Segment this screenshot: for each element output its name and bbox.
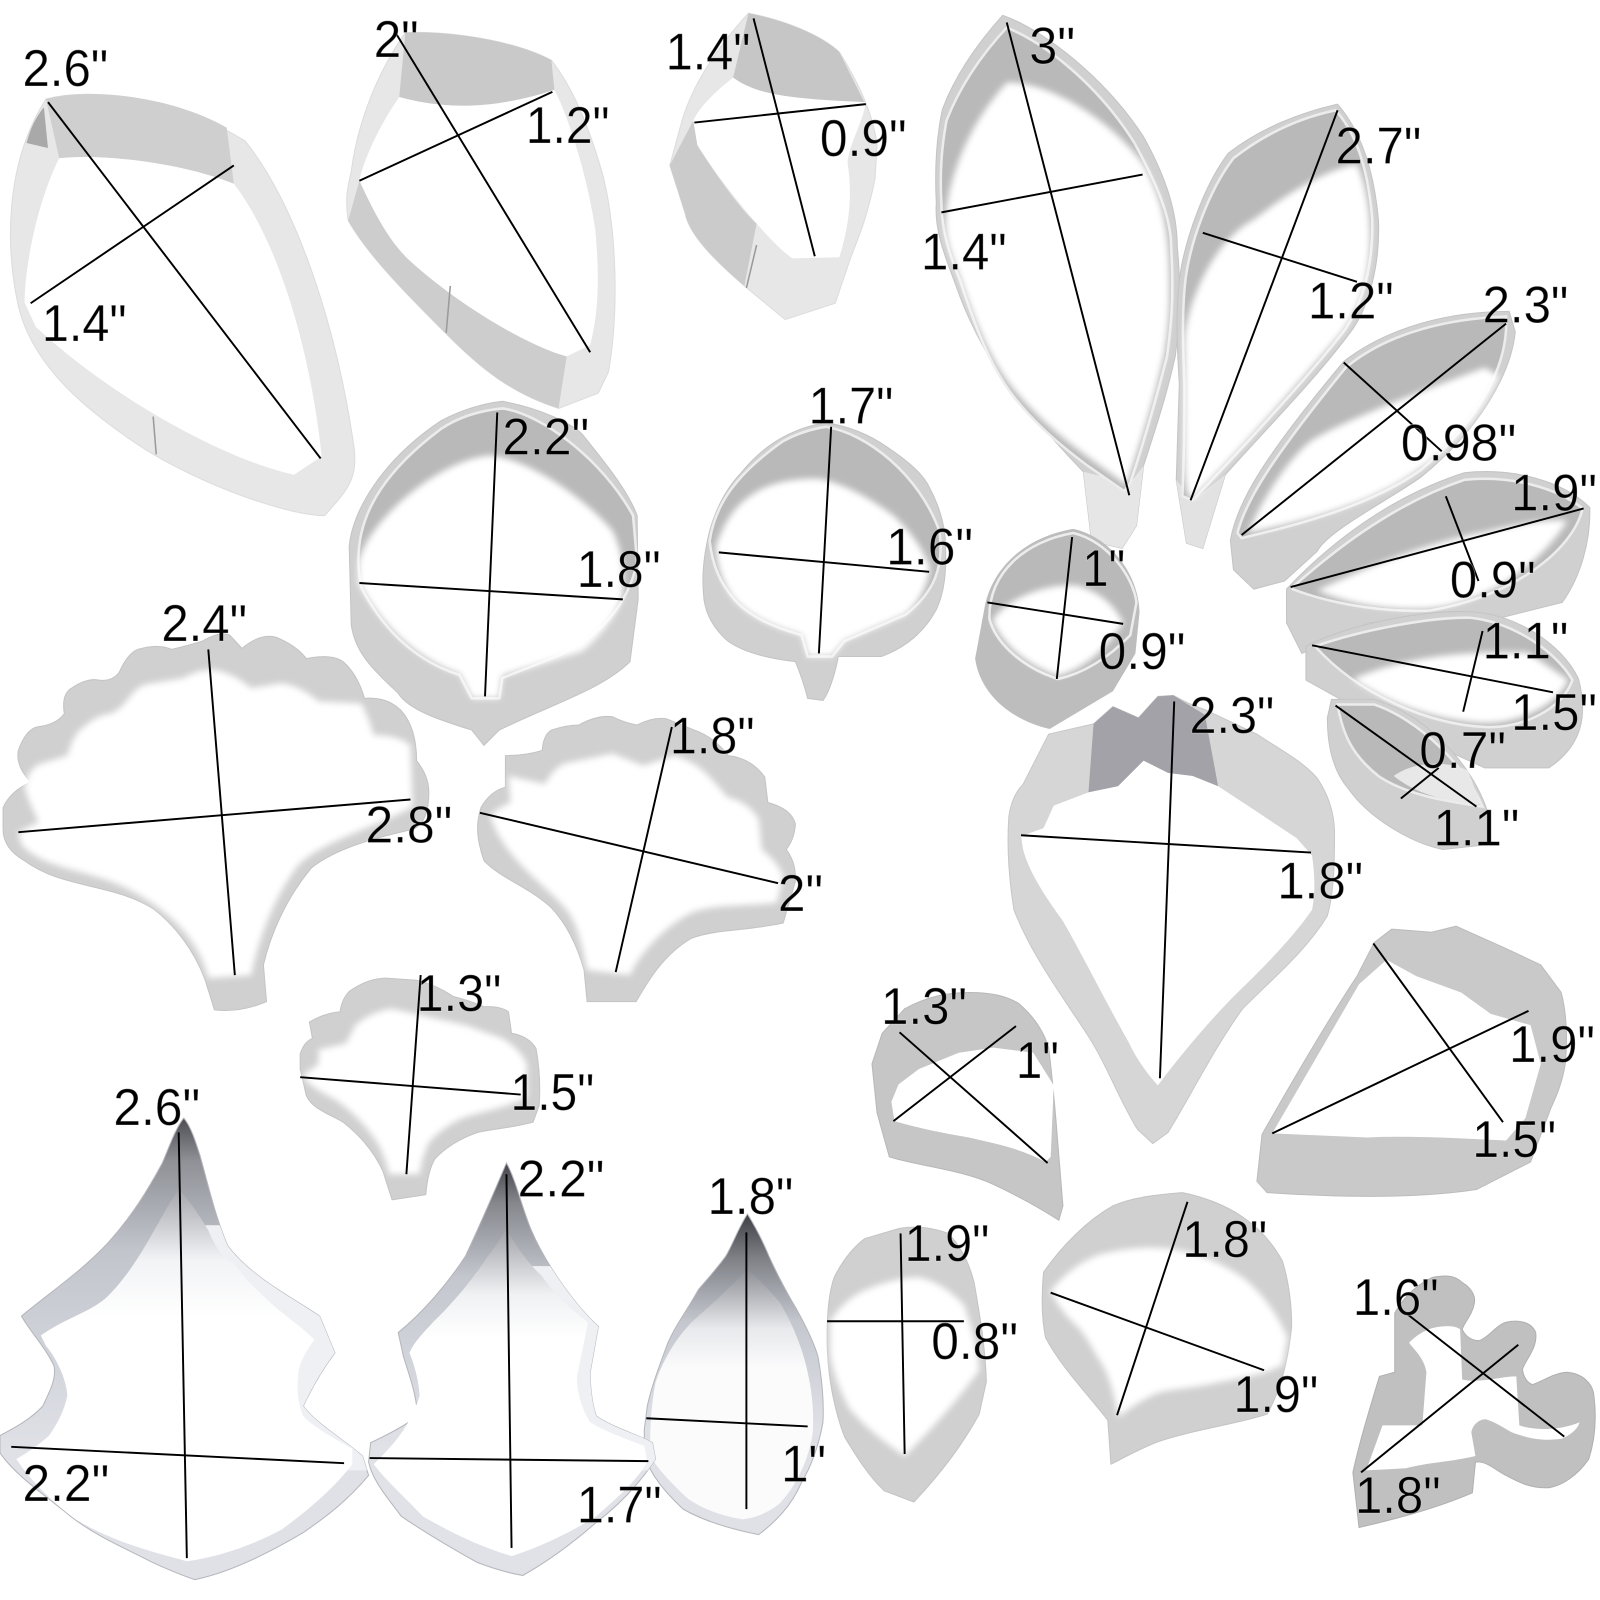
dimension lines [827, 1233, 964, 1454]
metal body [1306, 612, 1583, 768]
cutter: fan petal 1.1 inch [1327, 699, 1519, 857]
cutter: large pointed sepal with notched top [1008, 687, 1363, 1144]
label: 1.4 in: 1.4" [42, 295, 127, 353]
dimension lines [31, 102, 321, 458]
label: 2.2 in: 2.2" [22, 1455, 109, 1513]
label: 0.9 in: 0.9" [1099, 623, 1185, 681]
label: 1 in: 1" [1016, 1032, 1059, 1090]
label: 1.2 in: 1.2" [526, 97, 610, 155]
label: 1.8 in: 1.8" [1182, 1211, 1267, 1269]
metal body [1008, 695, 1335, 1144]
metal body [478, 716, 795, 1002]
dimension lines [1021, 701, 1311, 1078]
dimension lines [1051, 1202, 1264, 1415]
label: 1 in: 1" [1082, 540, 1125, 598]
label: 1.7 in: 1.7" [577, 1476, 662, 1534]
label: 1.9 in: 1.9" [1511, 465, 1597, 523]
dimension lines [893, 1026, 1048, 1163]
label: 2.2 in: 2.2" [518, 1151, 604, 1209]
label: 1.9 in: 1.9" [1233, 1366, 1318, 1424]
metal body [1176, 104, 1379, 548]
cutter: small scalloped fan [300, 965, 594, 1200]
cutter: medium rounded petal [347, 11, 615, 408]
metal body [1327, 699, 1490, 850]
label: 1.1 in: 1.1" [1434, 799, 1519, 857]
dimension lines [1291, 496, 1584, 587]
label: 1.8 in: 1.8" [1277, 853, 1363, 911]
cutter: large scalloped fan [3, 595, 452, 1010]
label: 1.7 in: 1.7" [809, 378, 893, 436]
cutter: round petal 2.2 inch [349, 401, 661, 745]
dimension lines [719, 427, 929, 653]
metal body [872, 992, 1063, 1220]
dimension lines [1361, 1313, 1564, 1472]
dimension lines [359, 34, 590, 352]
cutter: fan petal 3 inch [921, 15, 1180, 548]
metal body [936, 15, 1180, 548]
dimension lines [18, 649, 410, 975]
metal body [1230, 311, 1515, 589]
cutter: small pointed drop [644, 1168, 826, 1535]
label: 1.5 in: 1.5" [1511, 684, 1597, 742]
metal body [670, 13, 877, 320]
cutter: large rounded petal, top left [10, 40, 355, 516]
dimension lines [300, 975, 521, 1174]
dimension lines [1242, 324, 1506, 535]
label: 1 in: 1" [781, 1436, 826, 1494]
label: 2.6 in: 2.6" [113, 1079, 200, 1137]
cutter: small round petal [975, 529, 1185, 729]
label: 2.7 in: 2.7" [1336, 117, 1421, 175]
cutter: teardrop 1.9 inch [827, 1215, 1018, 1502]
cutter: fan petal 1.5 inch [1306, 612, 1597, 768]
label: 1.4 in: 1.4" [921, 224, 1007, 282]
label: 1.6 in: 1.6" [886, 519, 973, 577]
label: 1.8 in: 1.8" [670, 708, 755, 766]
metal body [644, 1214, 823, 1535]
metal body [349, 401, 638, 745]
metal body [347, 32, 615, 408]
cutter: fan petal 1.9 inch [1287, 465, 1597, 653]
metal body [3, 634, 429, 1010]
dimension lines [370, 1174, 648, 1548]
cutter: curved crescent petal [1042, 1193, 1318, 1464]
dimension lines [1312, 631, 1553, 712]
metal body [369, 1163, 656, 1575]
dimension lines [359, 413, 623, 696]
metal body [1042, 1193, 1292, 1464]
label: 2.3 in: 2.3" [1483, 277, 1568, 335]
label: 2 in: 2" [778, 865, 823, 923]
label: 1.2 in: 1.2" [1308, 273, 1394, 331]
dimension lines [11, 1132, 344, 1558]
label: 0.9 in: 0.9" [1450, 551, 1536, 609]
metal body [703, 423, 946, 700]
cutter: round petal 1.7 inch [703, 378, 973, 700]
label: 2.6 in: 2.6" [22, 40, 108, 98]
label: 2.8 in: 2.8" [366, 796, 452, 854]
dimension lines [987, 537, 1123, 679]
label: 1.8 in: 1.8" [577, 541, 661, 599]
dimension lines [1191, 110, 1357, 500]
label: 3 in: 3" [1029, 17, 1075, 75]
metal body [1353, 1276, 1595, 1528]
cutter: club-shaped leaf [1353, 1269, 1595, 1528]
dimension lines [646, 1232, 808, 1509]
cutter: medium scalloped fan [478, 708, 823, 1002]
label: 1.8 in: 1.8" [708, 1168, 793, 1226]
dimension lines [480, 727, 778, 972]
label: 1.4 in: 1.4" [666, 23, 750, 81]
label: 2 in: 2" [374, 11, 419, 69]
cutter: medium wedge with notched edge [1257, 926, 1595, 1196]
label: 1.9 in: 1.9" [905, 1215, 989, 1273]
label: 1.6 in: 1.6" [1353, 1269, 1439, 1327]
label: 0.98 in: 0.98" [1401, 414, 1516, 472]
cutter: medium tree-shaped sepal [369, 1151, 662, 1575]
cutter: fan petal 2.7 inch [1176, 104, 1421, 548]
label: 0.9 in: 0.9" [820, 110, 907, 168]
label: 1.5 in: 1.5" [511, 1064, 594, 1122]
label: 2.3 in: 2.3" [1190, 687, 1274, 745]
metal body [300, 978, 540, 1200]
cutter: small wedge with notched edge [872, 978, 1063, 1220]
label: 2.2 in: 2.2" [502, 408, 589, 466]
label: 1.3 in: 1.3" [881, 978, 967, 1036]
dimension lines [1272, 943, 1529, 1133]
label: 1.1 in: 1.1" [1483, 613, 1568, 671]
metal body [10, 94, 355, 516]
cutter: fan petal 2.3 inch [1230, 277, 1568, 589]
dimension lines [941, 22, 1143, 495]
metal body [1257, 926, 1567, 1196]
label: 1.5 in: 1.5" [1472, 1111, 1556, 1169]
metal body [1287, 472, 1590, 653]
metal body [827, 1227, 986, 1502]
dimension lines [694, 18, 866, 256]
label: 1.9 in: 1.9" [1509, 1016, 1595, 1074]
label: 1.8 in: 1.8" [1355, 1467, 1441, 1525]
metal body [0, 1118, 369, 1580]
cutter: large tree-shaped sepal [0, 1079, 369, 1580]
dimension lines [1336, 706, 1476, 807]
cutter: small rounded petal [666, 13, 907, 320]
label: 2.4 in: 2.4" [161, 595, 247, 653]
label: 1.3 in: 1.3" [417, 965, 501, 1023]
label: 0.8 in: 0.8" [931, 1313, 1018, 1371]
label: 0.7 in: 0.7" [1419, 722, 1506, 780]
metal body [975, 529, 1140, 729]
